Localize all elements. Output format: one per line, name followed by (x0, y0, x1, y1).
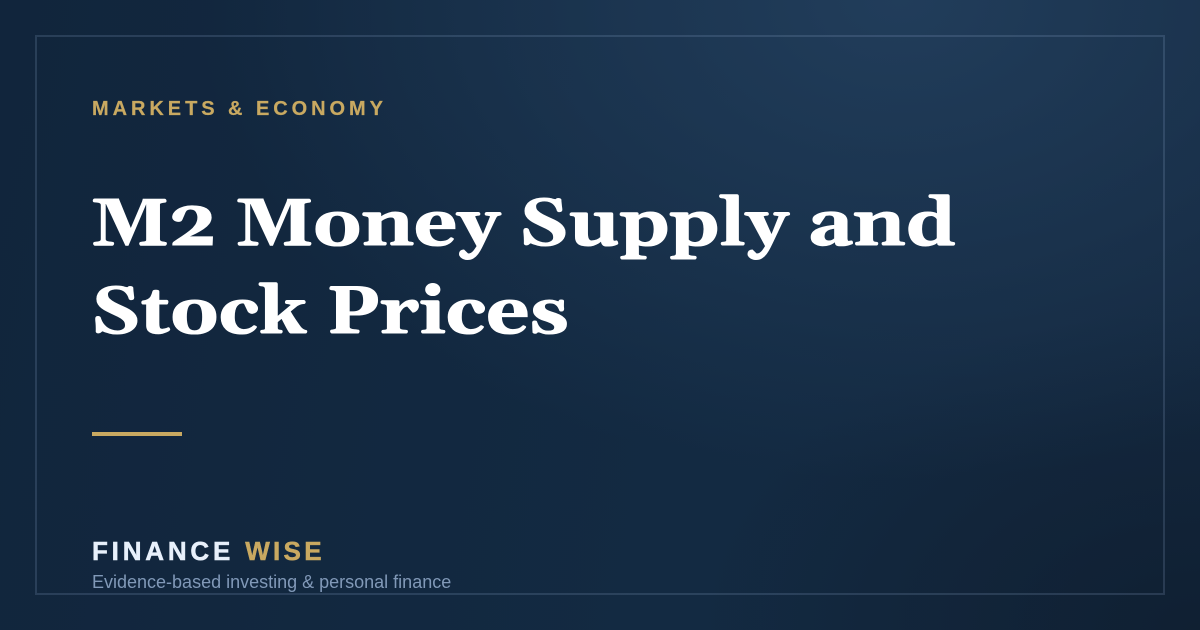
tagline: Evidence-based investing & personal finance (92, 572, 451, 592)
gold accent rule (92, 432, 182, 436)
brand name: FINANCE WISE (92, 536, 325, 566)
title (91, 183, 956, 356)
category label: MARKETS & ECONOMY (92, 98, 387, 120)
title: M2 Money Supply and (91, 183, 956, 268)
title: Stock Prices (91, 271, 568, 356)
